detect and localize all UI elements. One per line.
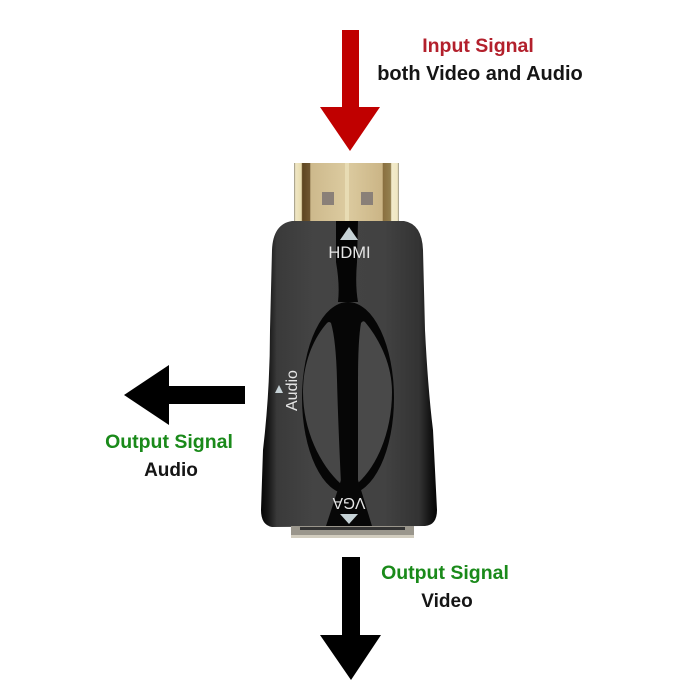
heading: input signal: Input Signal xyxy=(422,35,534,57)
heading: output signal audio: Audio xyxy=(144,460,198,481)
oval inlay outline xyxy=(302,302,394,494)
label: Audio: Audio xyxy=(284,370,301,411)
label: HDMI xyxy=(328,227,371,262)
arrow: audio output (black, pointing left) xyxy=(124,365,245,425)
label: VGA: VGA xyxy=(332,494,365,511)
heading: output signal video xyxy=(381,562,509,612)
label: HDMI: HDMI xyxy=(328,244,371,262)
heading: input signal xyxy=(377,35,583,85)
lower black stripe xyxy=(326,480,372,526)
oval left panel xyxy=(303,322,341,484)
adapter body xyxy=(261,221,437,527)
arrow: input signal (red, pointing down) xyxy=(320,30,380,151)
VGA metal connector xyxy=(291,526,414,538)
heading: output signal video: Video xyxy=(421,591,473,612)
black centre stripe xyxy=(336,221,358,302)
HDMI gold connector xyxy=(294,163,399,223)
label: Audio xyxy=(275,370,301,411)
heading: output signal video: Output Signal xyxy=(381,562,509,584)
oval right panel xyxy=(358,321,392,483)
heading: input signal: both Video and Audio xyxy=(377,63,583,85)
heading: output signal audio: Output Signal xyxy=(105,431,233,453)
heading: output signal audio xyxy=(105,431,233,481)
arrow: video output (black, pointing down) xyxy=(320,557,381,680)
illustration: HDMI to VGA adapter xyxy=(261,163,437,538)
label: VGA xyxy=(332,494,365,524)
